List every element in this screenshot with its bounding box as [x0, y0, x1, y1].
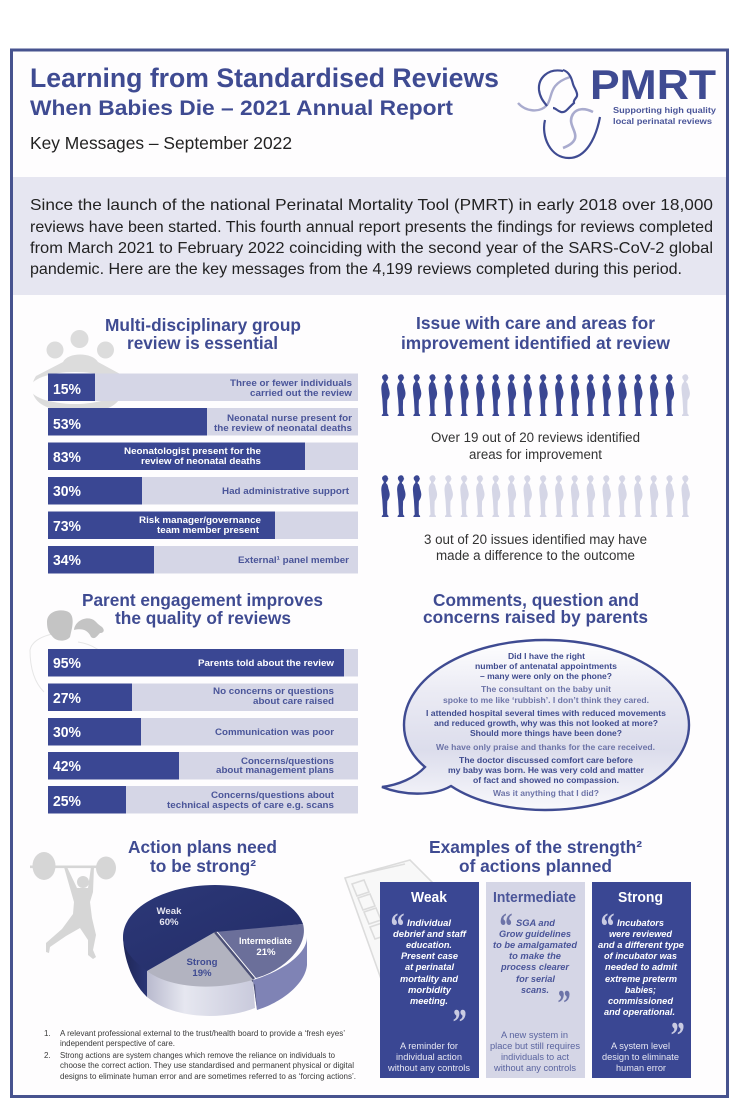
- heading: Multi-disciplinary group: [105, 315, 301, 335]
- pie labels: 19%: [192, 968, 212, 979]
- heading: [401, 313, 671, 353]
- bar: 30%: Communication was poor: [215, 727, 334, 737]
- card: intermediate: ”: [556, 983, 570, 1025]
- card: strong: “: [599, 906, 614, 948]
- card: strong: babies;: [625, 985, 656, 996]
- bar: 34%: [48, 546, 358, 574]
- card: intermediate: SGA and: [516, 918, 555, 929]
- bar: 53%: 53%: [53, 417, 81, 433]
- footnotes: independent perspective of care.: [60, 1039, 175, 1048]
- bar: 27%: No concerns or questions: [213, 686, 334, 696]
- bar: 15%: [48, 374, 358, 401]
- quotes: of fact and showed no compassion.: [473, 775, 619, 785]
- card: intermediate: place but still requires: [490, 1040, 580, 1051]
- bar: 42%: Concerns/questions: [241, 756, 334, 766]
- card: strong: were reviewed: [609, 929, 672, 940]
- caption: 3 of 20: [424, 532, 647, 563]
- card: intermediate: A new system in: [501, 1029, 568, 1040]
- card: intermediate: [486, 882, 585, 1078]
- panel: issues with care: [381, 313, 690, 563]
- bar: 73%: Risk manager/governance: [139, 515, 261, 525]
- card: intermediate: for serial: [516, 974, 555, 985]
- card: weak: ”: [451, 1002, 466, 1044]
- heading: improvement identified at review: [401, 333, 671, 353]
- footnotes: 2.: [44, 1051, 51, 1060]
- bar: 25%: 25%: [53, 794, 81, 810]
- card: strong: design to eliminate: [602, 1051, 679, 1062]
- caption: 19 of 20: [431, 430, 640, 462]
- bar: 30%: [48, 718, 358, 746]
- heading: the quality of reviews: [115, 608, 291, 628]
- bar: 95%: Parents told about the review: [198, 658, 335, 668]
- card: weak: A reminder for: [400, 1040, 458, 1051]
- panel: parent engagement: [30, 590, 358, 814]
- icon: checklist: [345, 860, 432, 990]
- pie labels: Weak: [157, 906, 182, 917]
- bar: 73%: 73%: [53, 519, 81, 535]
- card: intermediate: Grow guidelines: [499, 929, 571, 940]
- heading: [105, 315, 301, 353]
- footnotes: Strong actions are system changes which remove the reliance on individuals to: [60, 1051, 336, 1060]
- card: weak: [380, 882, 479, 1078]
- quotes: I attended hospital several times with reduced movements: [426, 708, 666, 718]
- card: intermediate: individuals to act: [501, 1051, 569, 1062]
- quotes: Should more things have been done?: [470, 728, 622, 738]
- caption: 3 of 20: made a difference to the outcome: [436, 548, 635, 563]
- panel: introduction: from March 2021 to February 2022 coinciding with the second year of the SARS-CoV-2 global: [30, 240, 713, 257]
- icon: weightlifter: [30, 852, 116, 959]
- bar: 83%: Neonatologist present for the: [124, 446, 261, 456]
- heading: Parent engagement improves: [82, 590, 323, 610]
- caption: 19 of 20: Over 19 out of 20 reviews identified: [431, 430, 640, 445]
- panel: multi-disciplinary review: [30, 315, 358, 574]
- bar: 42%: [48, 752, 358, 780]
- card: weak: at perinatal: [405, 962, 454, 973]
- bar: 42%: 42%: [53, 759, 81, 775]
- card: weak: without any controls: [387, 1062, 470, 1073]
- footnotes: [44, 1029, 356, 1081]
- card: strong: and operational.: [604, 1007, 675, 1018]
- quotes: – many were only on the phone?: [480, 671, 612, 681]
- pie labels: Intermediate: [239, 936, 292, 947]
- panel: introduction: [13, 177, 726, 295]
- heading: concerns raised by parents: [423, 607, 648, 627]
- quotes: number of antenatal appointments: [475, 661, 617, 671]
- bar: 15%: carried out the review: [250, 388, 353, 398]
- bar: 73%: [48, 512, 358, 539]
- bar: 30%: [48, 477, 358, 504]
- card: weak: mortality and: [400, 974, 458, 985]
- quotes: Was it anything that I did?: [493, 788, 599, 798]
- footnotes: choose the correct action. They use standardised and permanent physical or digital: [60, 1061, 354, 1070]
- bar: 27%: [48, 684, 358, 711]
- card: strong: and a different type: [598, 940, 685, 951]
- subtitle: When Babies Die – 2021 Annual Report: [30, 96, 453, 120]
- panel: parent comments: [382, 590, 689, 810]
- caption: 19 of 20: areas for improvement: [469, 447, 602, 462]
- heading: Issue with care and areas for: [416, 313, 655, 333]
- card: intermediate: to be amalgamated: [493, 940, 577, 951]
- pie labels: 60%: [159, 917, 179, 928]
- panel: introduction: pandemic. Here are the key messages from the 4,199 reviews completed during this period.: [30, 261, 682, 278]
- bar: 83%: [48, 442, 358, 470]
- quotes: my baby was born. He was very cold and matter: [448, 765, 645, 775]
- card: strong: [592, 882, 691, 1078]
- quotes: The doctor discussed comfort care before: [459, 755, 633, 765]
- card: strong: extreme preterm: [605, 974, 678, 985]
- heading: [128, 837, 277, 876]
- panel: action plans: [30, 837, 356, 1081]
- footnotes: 1.: [44, 1029, 51, 1038]
- bar: 30%: Had administrative support: [222, 486, 349, 496]
- heading: [82, 590, 323, 628]
- bar: 25%: [48, 786, 358, 814]
- quotes: spoke to me like ‘rubbish’. I don’t think they cared.: [443, 695, 649, 705]
- bar: 27%: 27%: [53, 691, 81, 707]
- bar: 53%: [48, 408, 358, 436]
- bar: 34%: 34%: [53, 553, 81, 569]
- card: strong: A system level: [611, 1040, 670, 1051]
- card: weak: “: [389, 906, 404, 948]
- card: strong: Strong: [618, 889, 663, 906]
- pictogram: 19 of 20: [381, 374, 690, 416]
- quotes: The consultant on the baby unit: [481, 684, 611, 694]
- pie labels: [157, 906, 292, 979]
- title: Learning from Standardised Reviews: [30, 63, 499, 93]
- bar: 73%: team member present: [157, 525, 259, 535]
- panel: introduction: Since the launch of the national Perinatal Mortality Tool (PMRT) in early 2018 over 18,000: [30, 197, 713, 214]
- panel: examples of strength: [345, 837, 691, 1078]
- heading: Examples of the strength²: [429, 837, 642, 857]
- panel: introduction: reviews have been started. This fourth annual report presents the findings for reviews completed: [30, 219, 713, 236]
- bar: 34%: External¹ panel member: [238, 555, 349, 565]
- card: intermediate: Intermediate: [493, 889, 576, 906]
- heading: to be strong²: [150, 856, 256, 876]
- bar: 95%: 95%: [53, 656, 81, 672]
- card: strong: ”: [669, 1015, 684, 1057]
- card: intermediate: scans.: [521, 985, 549, 996]
- caption: 3 of 20: 3 out of 20 issues identified may have: [424, 532, 647, 547]
- bar: 83%: 83%: [53, 450, 81, 466]
- quotes: Did I have the right: [508, 651, 585, 661]
- date line: Key Messages – September 2022: [30, 133, 292, 153]
- bar: 83%: review of neonatal deaths: [141, 456, 261, 466]
- card: weak: meeting.: [410, 996, 448, 1007]
- pictogram: 3 of 20: [381, 475, 690, 517]
- footnotes: A relevant professional external to the trust/health board to provide a ‘fresh eyes’: [60, 1029, 345, 1038]
- quotes: [426, 651, 666, 798]
- heading: review is essential: [127, 333, 278, 353]
- logo: PMRT: local perinatal reviews: [613, 116, 712, 126]
- bar: 53%: the review of neonatal deaths: [214, 423, 352, 433]
- card: intermediate: to make the: [509, 951, 562, 962]
- card: strong: needed to admit: [605, 962, 678, 973]
- heading: [423, 590, 648, 627]
- card: intermediate: without any controls: [493, 1062, 576, 1073]
- card: weak: Present case: [401, 951, 459, 962]
- logo: PMRT: PMRT: [590, 61, 716, 108]
- card: weak: education.: [406, 940, 452, 951]
- card: intermediate: process clearer: [500, 962, 570, 973]
- bar: 15%: Three or fewer individuals: [230, 378, 352, 388]
- card: intermediate: “: [498, 906, 512, 948]
- logo: PMRT: Supporting high quality: [613, 105, 716, 115]
- bar: 30%: 30%: [53, 484, 81, 500]
- pie chart: [123, 885, 307, 1016]
- logo: PMRT: [518, 61, 716, 158]
- card: weak: Individual: [407, 918, 451, 929]
- footnotes: designs to eliminate human error and are sometimes referred to as ‘forcing actions’.: [60, 1072, 356, 1081]
- card: strong: Incubators: [617, 918, 664, 929]
- card: weak: morbidity: [408, 985, 452, 996]
- card: strong: human error: [616, 1062, 666, 1073]
- bar: 25%: Concerns/questions about: [211, 790, 334, 800]
- pie labels: 21%: [256, 947, 276, 958]
- icon: parents: [30, 610, 108, 699]
- heading: of actions planned: [459, 856, 612, 876]
- quotes: and reduced growth, why was this not looked at more?: [434, 718, 658, 728]
- bar: 95%: [48, 649, 358, 676]
- header: [30, 61, 716, 158]
- bar: 27%: about care raised: [253, 696, 334, 706]
- card: weak: Weak: [411, 889, 448, 906]
- quotes: We have only praise and thanks for the care received.: [436, 742, 655, 752]
- speech bubble: [382, 640, 689, 810]
- heading: Action plans need: [128, 837, 277, 857]
- card: strong: commissioned: [608, 996, 673, 1007]
- icon: group of people: [30, 330, 124, 410]
- card: weak: debrief and staff: [393, 929, 467, 940]
- heading: Comments, question and: [433, 590, 639, 610]
- bar: 30%: 30%: [53, 725, 81, 741]
- pie labels: Strong: [187, 957, 218, 968]
- bar: 25%: technical aspects of care e.g. scans: [167, 800, 334, 810]
- bar: 53%: Neonatal nurse present for: [227, 413, 352, 423]
- bar: 15%: 15%: [53, 382, 81, 398]
- heading: [429, 837, 642, 876]
- card: strong: of incubator was: [604, 951, 677, 962]
- bar: 42%: about management plans: [216, 765, 334, 775]
- card: weak: individual action: [396, 1051, 462, 1062]
